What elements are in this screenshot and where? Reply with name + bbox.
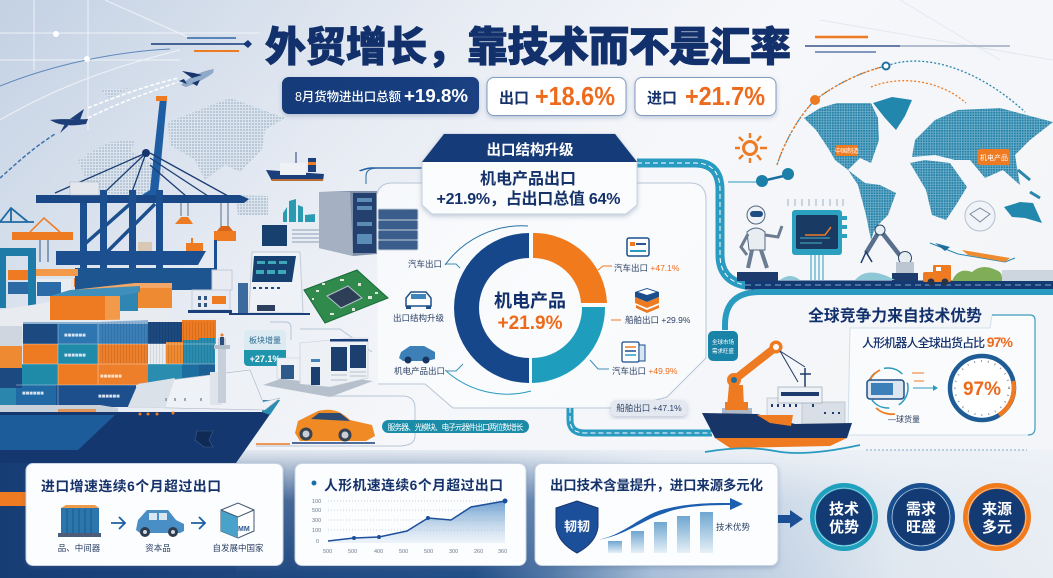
panel: line chart: 人形机速连续6个月超过出口 <box>324 477 503 493</box>
panel: global competitiveness <box>808 306 1035 435</box>
panel: tech content: 技术优势 <box>716 522 751 532</box>
arrow: trend <box>597 498 743 540</box>
icon: compact car <box>136 510 184 537</box>
icon: white car <box>406 292 431 309</box>
icon: document card <box>627 238 649 256</box>
container stacks <box>0 283 216 408</box>
robot arm <box>861 225 918 281</box>
panel: tech content: 出口技术含量提升，进口来源多元化 <box>550 477 764 493</box>
ribbon road: export flow <box>570 163 1053 433</box>
callout: +27.1% <box>244 330 286 366</box>
icon: shield <box>556 501 598 553</box>
panel: export structure upgrade header: +21.9%，占出口总值 64% <box>436 189 620 208</box>
hanging container spreaders <box>175 203 236 241</box>
panel: line chart: 500 <box>312 508 321 514</box>
icon: container crate <box>58 505 101 537</box>
route arcs <box>777 61 1025 165</box>
small route ships <box>930 243 1015 262</box>
icon: blue car <box>399 346 435 364</box>
decorative title lines left <box>151 38 252 51</box>
bar chart: rising <box>608 512 713 553</box>
map pins: 中国制造 <box>835 147 859 155</box>
panel: line chart: 0 <box>316 539 319 545</box>
icon: shipment device <box>867 368 938 424</box>
left donut labels: 机电产品出口 <box>394 366 445 376</box>
panel: tech content <box>535 464 778 566</box>
icon: report sheet <box>622 342 645 362</box>
large cargo ship with crane <box>702 340 1027 453</box>
container stacks: ■■■■■■ <box>100 374 122 380</box>
panel: line chart <box>295 464 526 566</box>
icon: layered stack <box>635 288 659 313</box>
background cargo ship <box>56 238 217 290</box>
panel: line chart: 400 <box>374 549 383 555</box>
panel: global competitiveness: 全球竞争力来自技术优势 <box>808 306 982 325</box>
gauge 97%: 97% <box>963 379 1001 400</box>
panel: line chart: 500 <box>323 549 332 555</box>
container stacks: ■■■■■■ <box>64 333 86 339</box>
arrow: first <box>111 517 125 529</box>
dotted world map background <box>78 88 285 215</box>
left donut labels <box>393 259 463 376</box>
stat pill: imports <box>635 78 776 116</box>
panel: import growth: 进口增速连续6个月超过出口 <box>41 478 221 494</box>
teal note banner <box>382 420 529 433</box>
badge: sources: 来源 <box>982 501 1012 518</box>
ship exports pill: 船舶出口 +47.1% <box>616 403 682 413</box>
ship exports pill <box>611 400 687 416</box>
factory building <box>263 338 373 397</box>
badge: sources <box>963 483 1031 551</box>
badge: sources: 多元 <box>982 518 1012 536</box>
icon: plane upper <box>179 69 214 87</box>
panel: global competitiveness: 人形机器人全球出货占比 97% <box>862 334 1014 350</box>
stat pill: imports: 进口 <box>647 90 677 107</box>
panel: export structure upgrade header: 出口结构升级 <box>486 141 574 159</box>
panel: line chart: 500 <box>348 549 357 555</box>
badge: demand: 需求 <box>906 500 936 518</box>
badge: technology <box>810 483 878 551</box>
callout: +27.1%: 板块增量 <box>249 335 281 345</box>
kiosk machine <box>188 252 310 314</box>
icon: plane lower <box>50 109 88 133</box>
map pins <box>835 145 1010 165</box>
container stacks: ■■■■■■ <box>64 353 86 359</box>
stat pill: imports: +21.7% <box>685 81 765 111</box>
container stacks: ■■■■■■ <box>22 391 44 397</box>
donut chart <box>445 226 607 394</box>
panel: line chart: 100 <box>312 528 321 534</box>
right donut labels: 船舶出口 +29.9% <box>625 315 691 325</box>
skyline bushes and truck <box>780 265 1053 286</box>
panel: export structure upgrade header <box>422 134 637 214</box>
stat pill: total trade: +19.8% <box>404 86 468 106</box>
map pins: 机电产品 <box>980 153 1008 162</box>
callout: +27.1%: +27.1% <box>250 354 280 364</box>
arrow: to circles <box>778 510 803 528</box>
panel: line chart: 500 <box>399 549 408 555</box>
badge: demand: 旺盛 <box>906 518 936 536</box>
left donut labels: 汽车出口 <box>408 259 442 269</box>
icon: parcel box <box>221 503 254 538</box>
stat pill: exports: +18.6% <box>535 81 615 111</box>
central panel backing <box>377 183 706 408</box>
flight path arcs <box>0 78 178 178</box>
small tag box <box>708 331 738 361</box>
stat pill: total trade: 8月货物进出口总额 <box>295 89 401 104</box>
left donut labels: 出口结构升级 <box>393 313 445 323</box>
icon: shield: 韧韧 <box>564 519 590 534</box>
panel: import growth <box>26 464 283 566</box>
donut chart: +21.9% <box>498 313 563 334</box>
panel: import growth: 资本品 <box>145 543 171 553</box>
circuit board <box>304 270 388 323</box>
gauge 97% <box>949 355 1015 421</box>
panel: import growth: 品、中间器 <box>58 543 101 553</box>
donut chart: 机电产品 <box>494 291 566 311</box>
panel: export structure upgrade header: 机电产品出口 <box>480 170 576 188</box>
server equipment <box>262 168 428 256</box>
control screen <box>788 199 847 280</box>
stat pill: exports: 出口 <box>499 90 529 107</box>
thin connector outlines <box>256 168 706 446</box>
large harbour crane <box>36 96 249 287</box>
stat pill: total trade <box>282 77 479 114</box>
panel: line chart: 360 <box>498 549 507 555</box>
badge: demand <box>887 483 955 551</box>
world map <box>804 97 1053 240</box>
orange car <box>256 410 375 444</box>
icon: shipment device: —球货量 <box>888 414 920 424</box>
main ship hull <box>0 334 280 506</box>
small left cranes <box>0 208 78 308</box>
panel: line chart: 100 <box>312 499 321 505</box>
right donut labels <box>590 263 691 376</box>
connector nodes <box>728 168 794 187</box>
small tag box: 需求旺盛 <box>712 347 734 355</box>
right donut labels: 汽车出口 +49.9% <box>612 366 678 376</box>
title: 外贸增长，靠技术而不是汇率 <box>265 24 791 70</box>
teal note banner: 服务器、光模块、电子元器件出口两位数增长 <box>388 422 524 432</box>
panel: line chart: 500 <box>424 549 433 555</box>
panel: import growth: 自发展中国家 <box>212 543 264 553</box>
stat pill: exports <box>487 78 626 116</box>
panel: line chart: 300 <box>312 518 321 524</box>
panel: line chart: 260 <box>474 549 483 555</box>
small ship top <box>266 152 324 181</box>
right donut labels: 汽车出口 +47.1% <box>614 263 680 273</box>
badge emblem <box>965 201 995 231</box>
icon: sun gear <box>735 133 767 163</box>
icon: parcel box: MM <box>238 526 250 533</box>
container stacks: ■■■■■■ <box>98 394 120 400</box>
badge: technology: 优势 <box>829 519 859 536</box>
panel: line chart: 300 <box>449 549 458 555</box>
robot <box>737 206 782 281</box>
badge: technology: 技术 <box>829 500 859 518</box>
arrow: second <box>191 517 205 529</box>
small tag box: 全球市场 <box>712 338 734 346</box>
decorative title lines right <box>805 37 1010 52</box>
